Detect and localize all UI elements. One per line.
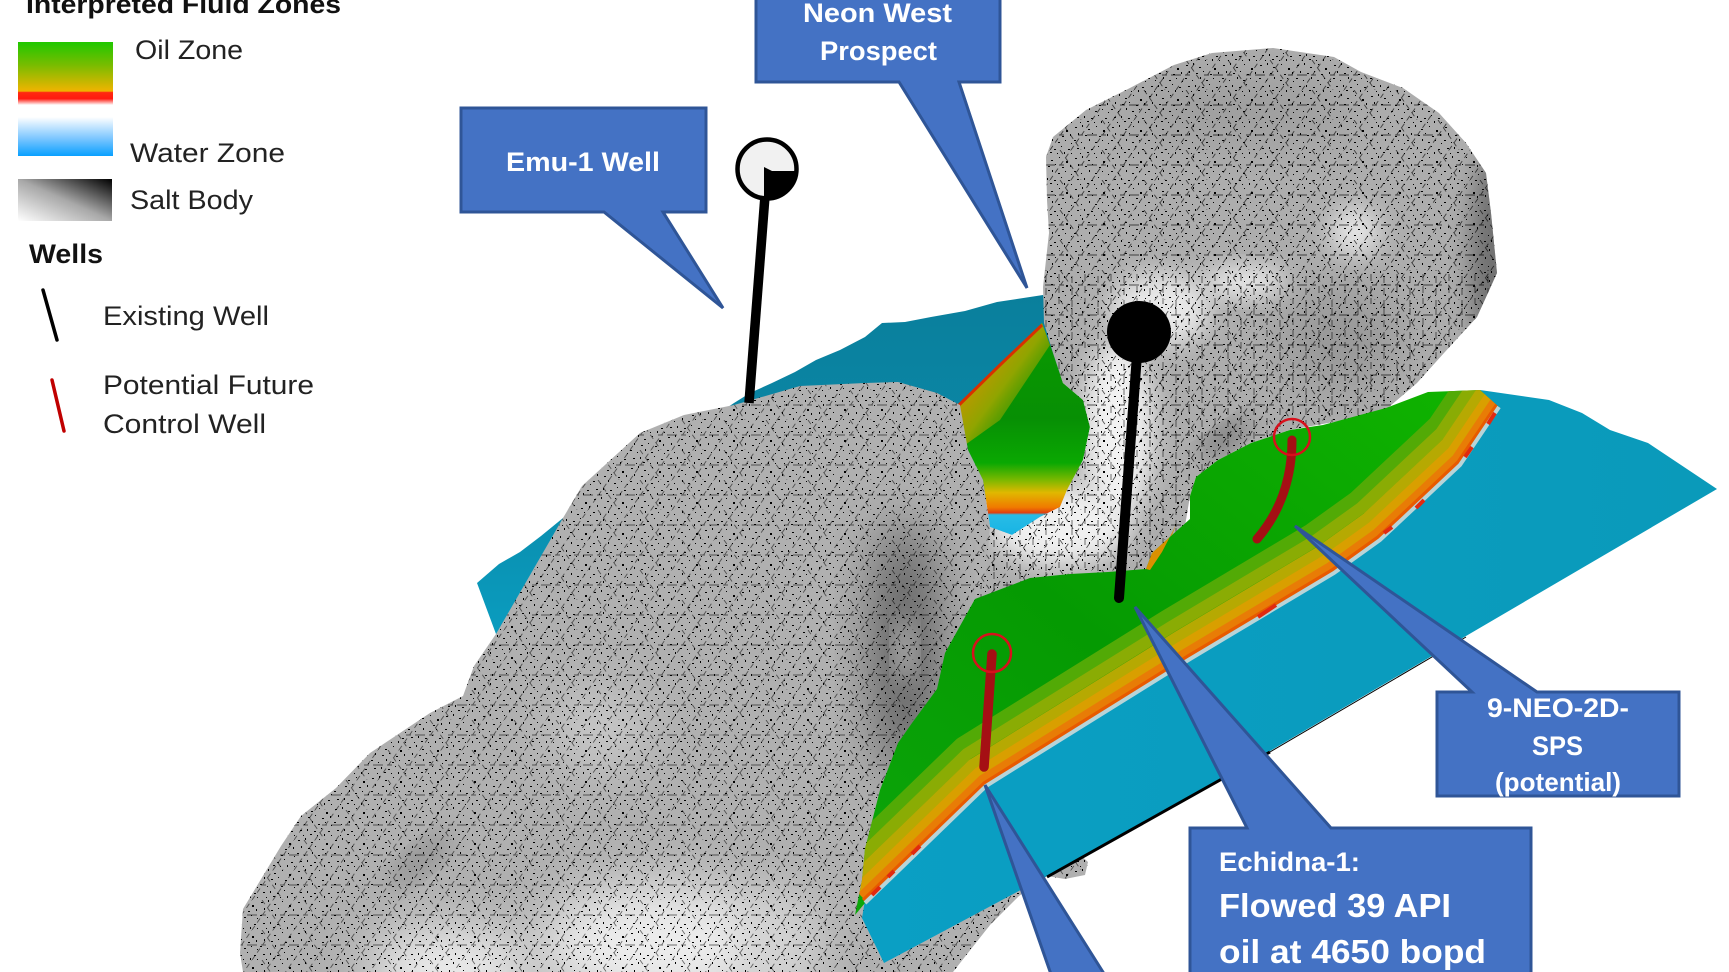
Echidna-1 well head <box>1107 301 1171 363</box>
callout: Emu-1 Well <box>461 108 723 308</box>
notch colour streak <box>1146 525 1176 570</box>
Emu-1 well stick <box>749 196 765 403</box>
legend symbol: existing well <box>43 290 57 340</box>
callout: 9-NEO-2D-SPS (potential): (potential) <box>1495 767 1621 797</box>
swatch: oil zone <box>18 42 113 105</box>
potential well: lower red well <box>973 634 1011 767</box>
callout: Neon West Prospect: Prospect <box>820 36 937 66</box>
callout: unnamed lower pointer <box>985 785 1108 972</box>
existing well: Emu-1 <box>738 140 796 403</box>
rear oil zone patch <box>958 323 1090 535</box>
upper red well stick <box>1257 440 1292 539</box>
callout: 9-NEO-2D-SPS (potential) <box>1295 526 1679 797</box>
callout: Emu-1 Well: Emu-1 Well <box>506 147 660 177</box>
front salt body <box>230 375 1110 972</box>
lower red well ring <box>973 634 1011 672</box>
legend <box>18 0 341 439</box>
callout: Echidna-1 result <box>1135 607 1531 972</box>
callout: 9-NEO-2D-SPS (potential): SPS <box>1532 731 1583 761</box>
label: potential future control well: Control Well <box>103 409 266 439</box>
label: salt body: Salt Body <box>130 185 254 215</box>
rear salt body <box>950 40 1514 600</box>
lower red well stick <box>984 654 992 767</box>
callout: 9-NEO-2D-SPS (potential): 9-NEO-2D- <box>1487 693 1629 723</box>
Echidna-1 flow result: oil at 4650 bopd <box>1219 933 1486 970</box>
Echidna-1 well stick <box>1119 355 1137 598</box>
upper red well ring <box>1274 419 1310 455</box>
label: oil zone: Oil Zone <box>135 35 243 65</box>
label: potential future control well: Potential Future <box>103 370 314 400</box>
rear salt shading <box>990 80 1514 565</box>
rear water zone surface <box>477 295 1060 640</box>
label: water zone: Water Zone <box>130 138 285 168</box>
main oil zone surface <box>841 366 1499 915</box>
callout: Neon West Prospect <box>756 0 1027 288</box>
main water zone surface <box>862 390 1717 963</box>
existing well: Echidna-1 <box>1107 301 1171 598</box>
Emu-1 well head wedge <box>764 167 796 198</box>
water surface lower edge shadow <box>1047 752 1270 877</box>
contact red marks <box>872 413 1495 895</box>
front salt shading <box>370 520 937 972</box>
Echidna-1 label: Echidna-1: <box>1219 847 1360 877</box>
swatch: water zone <box>18 117 113 156</box>
patch red contact line <box>958 325 1042 406</box>
oil-water transition bands <box>841 366 1498 901</box>
label: existing well: Existing Well <box>103 301 269 331</box>
legend symbol: potential future control well <box>52 380 64 431</box>
legend heading: wells: Wells <box>29 239 103 269</box>
Emu-1 well head circle <box>738 140 796 198</box>
contact pale line <box>865 407 1499 903</box>
swatch: salt body <box>18 179 112 221</box>
thin shadow along upper lower edge <box>1270 637 1466 752</box>
Echidna-1 flow result: Flowed 39 API <box>1219 887 1451 924</box>
patch updip colour bands <box>960 323 1050 445</box>
potential well: upper red well <box>1257 419 1310 539</box>
